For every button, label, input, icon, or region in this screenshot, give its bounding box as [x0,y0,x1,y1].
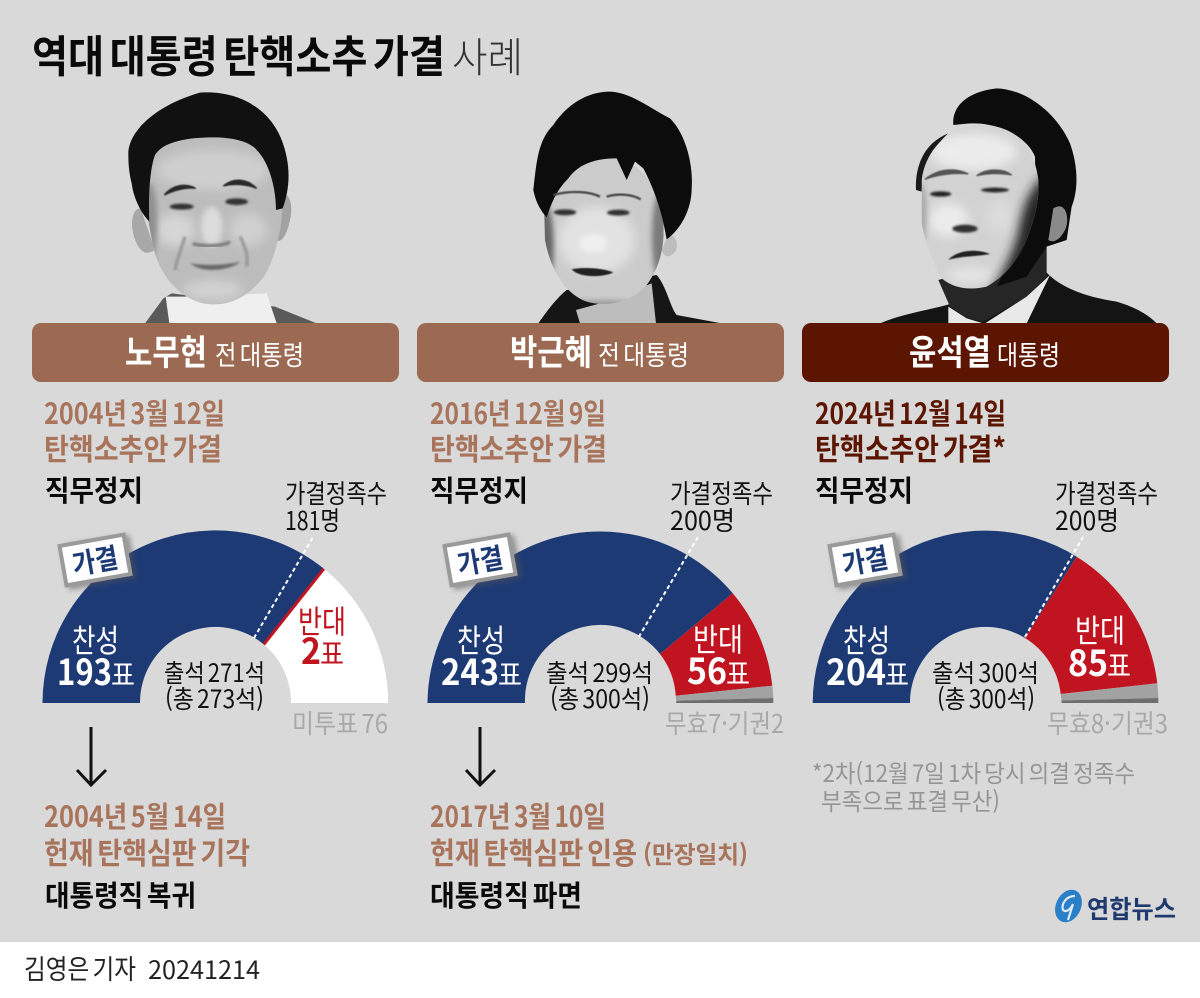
quorum label: 가결정족수 [285,474,387,511]
logo: Yonhap News [1050,885,1176,927]
name bar: 전 대통령 [215,334,304,373]
semicircle vote chart: 243 [441,644,499,696]
court ruling [430,794,748,873]
stamp: passed [830,534,907,590]
court ruling: 헌재 탄핵심판 기각 [44,829,250,873]
name bar [802,323,1169,382]
stamp: passed: 가결 [69,536,121,584]
semicircle vote chart: 찬성 [72,616,119,662]
semicircle vote chart [42,530,388,741]
title: 사례 [452,24,523,84]
semicircle vote chart: 반대 [1075,606,1125,652]
impeachment date: 2024년 12월 14일 [815,391,1006,433]
outcome: 대통령직 파면 [430,873,582,915]
name bar [32,323,399,382]
quorum label [285,474,387,538]
name bar: 박근혜 [510,325,592,376]
stamp: passed [60,534,137,590]
impeachment date: 2004년 3월 12일 [44,391,225,433]
semicircle vote chart: 193 [57,644,112,696]
name bar: 윤석열 [909,325,991,376]
impeachment date [815,391,1006,469]
semicircle vote chart: 출석 271석 [164,654,265,690]
semicircle vote chart: (총 273석) [165,680,264,716]
court ruling: (만장일치) [643,835,748,870]
photo: Roh Moo-hyun [128,92,317,323]
credit line: 20241214 [148,951,260,987]
stamp: passed: 가결 [839,536,891,584]
name bar: 전 대통령 [598,334,689,373]
semicircle vote chart: 무효8·기권3 [1047,704,1168,741]
impeachment date: 탄핵소추안 가결 [430,425,607,469]
status: 직무정지 [45,468,143,510]
stamp: passed: 가결 [454,536,506,584]
photo: Park Geun-hye [533,92,722,323]
quorum label: 가결정족수 [670,474,773,511]
name bar: 노무현 [125,325,207,376]
semicircle vote chart: 표 [111,652,135,694]
semicircle vote chart: 무효7·기권2 [665,704,784,741]
credit line [24,948,260,987]
court ruling: 2017년 3월 10일 [430,794,606,836]
footnote [812,754,1135,817]
semicircle vote chart: 2 [301,623,321,675]
panel: Yoon Suk-yeol [802,323,1169,817]
semicircle vote chart: (총 300석) [550,680,650,716]
impeachment date: 탄핵소추안 가결 [44,425,222,469]
impeachment date: 2016년 12월 9일 [430,391,606,433]
title: 역대 대통령 탄핵소추 가결 [32,21,445,85]
semicircle vote chart: 출석 300석 [932,654,1039,690]
quorum label: 181명 [285,501,340,538]
stamp: passed [445,534,522,590]
semicircle vote chart: 표 [885,652,909,694]
quorum label: 200명 [670,501,735,538]
semicircle vote chart: 표 [1107,643,1131,685]
court ruling: 헌재 탄핵심판 인용 [430,829,637,873]
semicircle vote chart: 찬성 [843,616,890,662]
footnote: 부족으로 표결 무산) [821,782,1000,817]
outcome: 대통령직 복귀 [45,873,196,915]
semicircle vote chart: 찬성 [457,616,505,662]
semicircle vote chart [813,531,1168,741]
status: 직무정지 [430,468,528,510]
semicircle vote chart: 반대 [693,615,743,661]
quorum label: 가결정족수 [1055,474,1158,511]
name bar [417,323,784,382]
semicircle vote chart: 표 [498,652,522,694]
semicircle vote chart: 56 [687,643,727,695]
semicircle vote chart [428,532,784,741]
semicircle vote chart: 출석 299석 [546,654,653,690]
semicircle vote chart: 표 [726,651,750,693]
quorum label: 200명 [1055,501,1119,538]
semicircle vote chart: 85 [1068,635,1108,687]
arrow [466,727,495,785]
impeachment date: 탄핵소추안 가결* [815,425,1006,469]
photo: Yoon Suk-yeol [880,88,1157,323]
panel: Roh Moo-hyun [32,323,399,915]
semicircle vote chart: (총 300석) [937,680,1035,716]
semicircle vote chart: 반대 [298,597,346,643]
impeachment date [430,391,607,469]
arrow [77,727,106,785]
credit line: 김영은 기자 [24,948,136,987]
semicircle vote chart: 204 [826,644,886,696]
status: 직무정지 [815,468,913,510]
semicircle vote chart: 미투표 76 [292,704,388,741]
footnote: *2차(12월 7일 1차 당시 의결 정족수 [812,754,1135,789]
quorum label [1055,474,1158,538]
logo: Yonhap News: 연합뉴스 [1087,890,1176,926]
court ruling [44,794,250,873]
semicircle vote chart: 표 [320,631,344,673]
quorum label [670,474,773,538]
impeachment date [44,391,225,469]
panel: Park Geun-hye [417,323,784,915]
name bar: 대통령 [997,334,1060,373]
court ruling: 2004년 5월 14일 [44,794,226,836]
